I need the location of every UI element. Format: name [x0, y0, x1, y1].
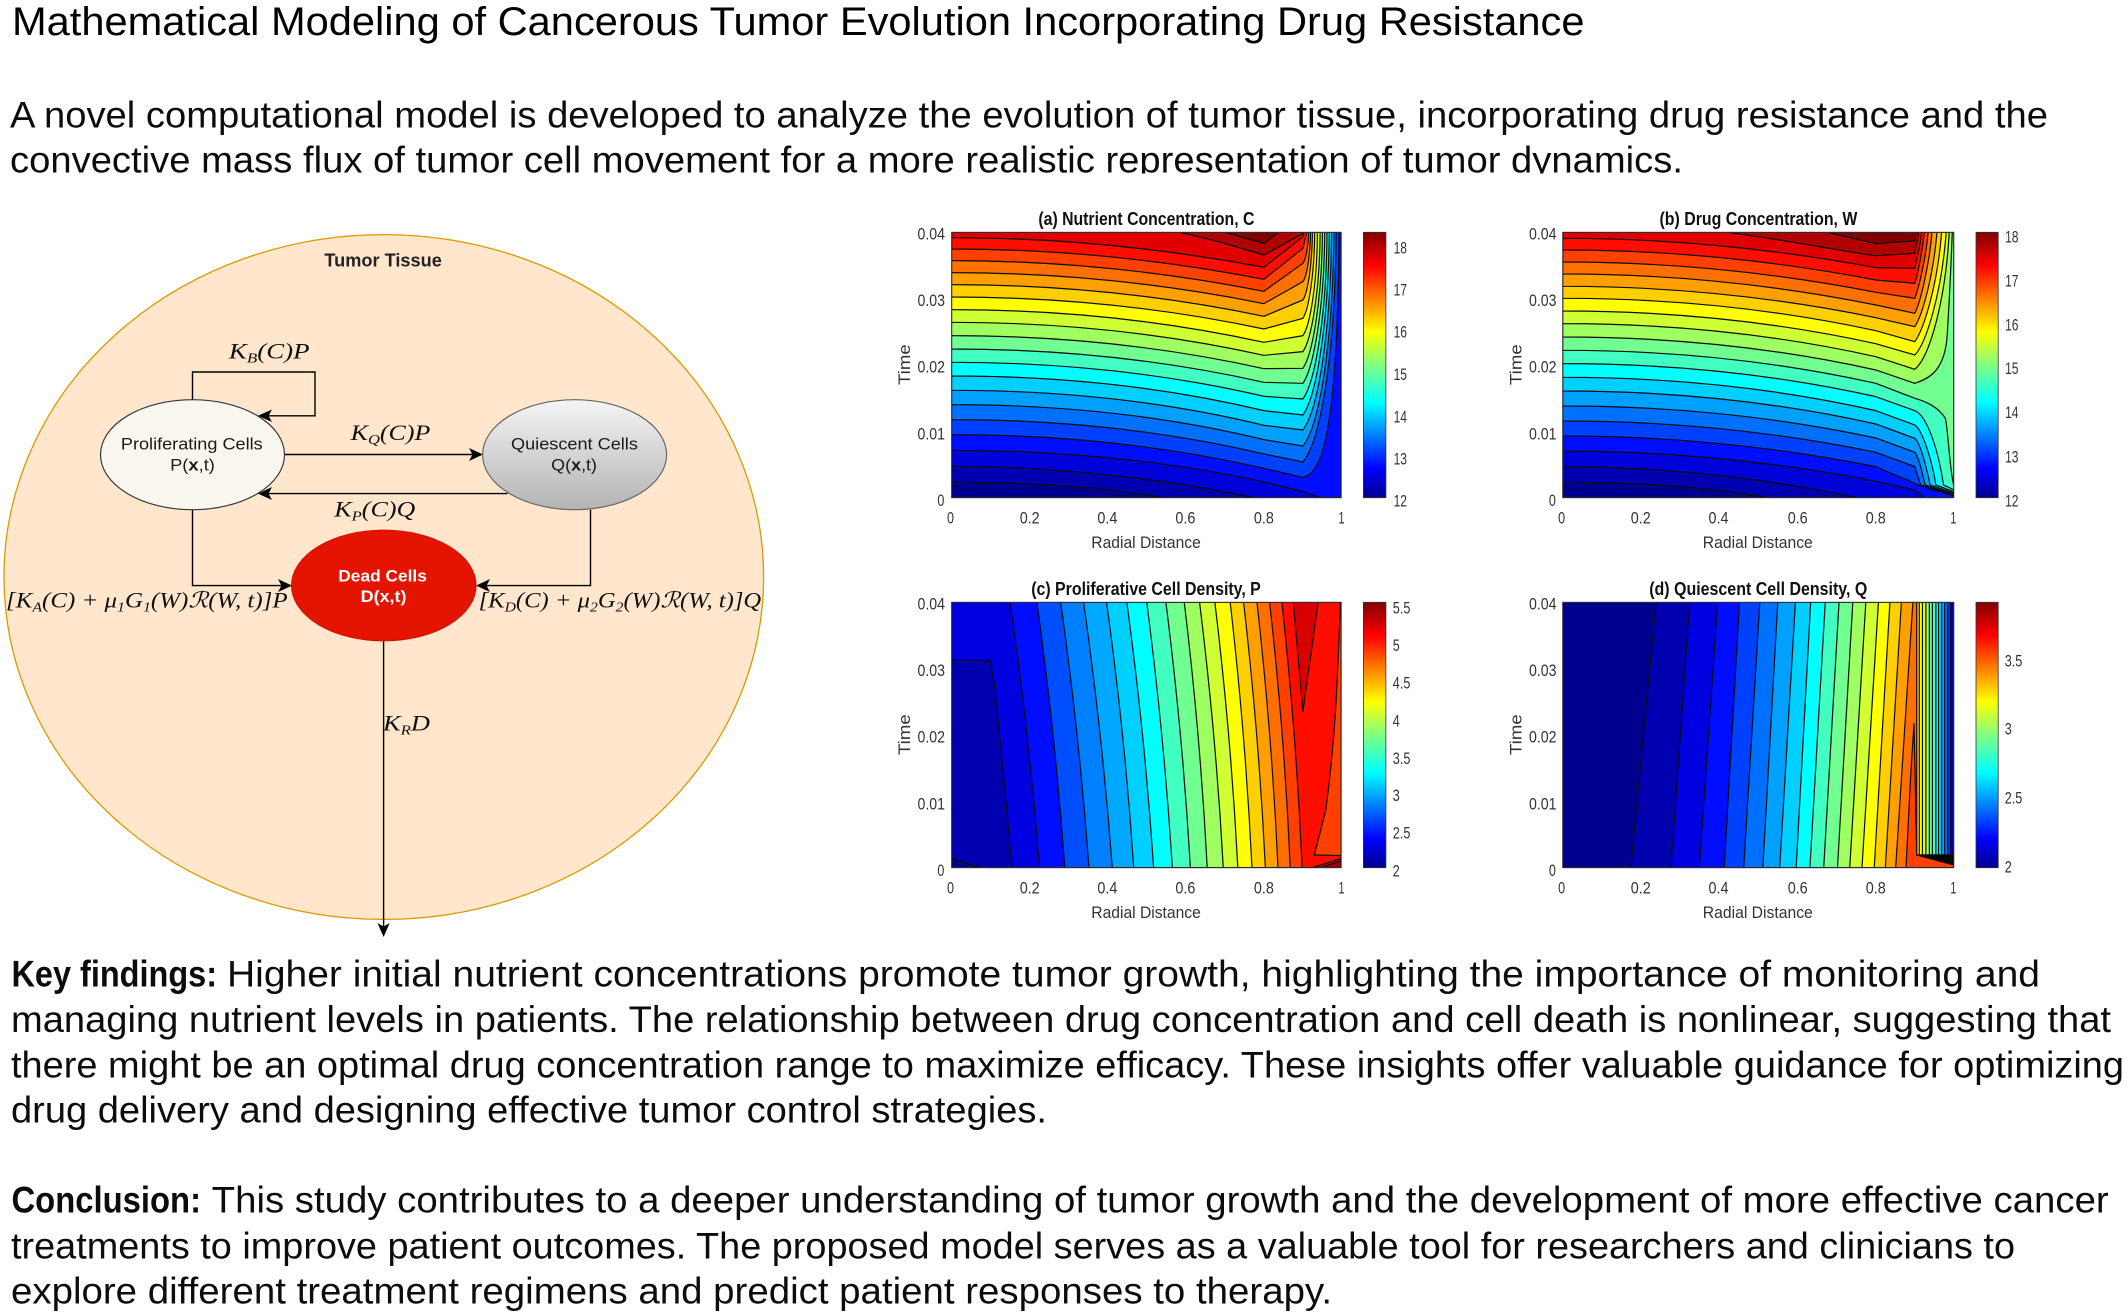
- y axis ticks c: [918, 594, 945, 880]
- x axis ticks c: 0.8: [1254, 878, 1274, 898]
- rate label: quiescent death rate: 2: [616, 600, 623, 615]
- colorbar c: 5: [1393, 636, 1400, 655]
- y axis ticks d: 0.02: [1529, 728, 1556, 747]
- colorbar b: 12: [2005, 491, 2018, 510]
- x axis label a: Radial Distance: [1091, 533, 1201, 552]
- chart: (a) nutrient concentration contour: [895, 209, 1407, 552]
- plot frame b: [1563, 232, 1954, 498]
- colorbar b: 13: [2005, 447, 2018, 466]
- x axis ticks a: 0: [947, 508, 954, 528]
- y axis label a: Time: [895, 344, 914, 385]
- rate label: proliferating death rate: (C) + μ: [42, 587, 117, 612]
- x axis ticks a: 1: [1338, 508, 1344, 528]
- colorbar c: 3: [1393, 786, 1400, 805]
- node: proliferating cells: Proliferating Cells: [121, 435, 263, 454]
- key findings text block: [11, 954, 2124, 1131]
- rate label: quiescent death rate: 2: [590, 600, 598, 615]
- x axis ticks d: [1558, 878, 1956, 898]
- y axis ticks a: 0.03: [918, 291, 945, 310]
- chart title c: (c) Proliferative Cell Density, P: [1031, 579, 1261, 599]
- colorbar b: [1976, 228, 2018, 510]
- title: Mathematical Modeling of Cancerous Tumor Evolution Incorporating Drug Resistance: [12, 0, 1584, 44]
- x axis ticks b: 0.2: [1631, 508, 1651, 528]
- rate label: KB(C)P: K: [229, 339, 244, 364]
- plot frame a: [952, 232, 1341, 498]
- node: proliferating cells: P(x,t): [170, 456, 215, 474]
- arrow: dead cell removal: [378, 641, 390, 937]
- rate label: proliferating death rate: 1: [143, 600, 151, 615]
- rate label: proliferating death rate: 1: [117, 600, 125, 615]
- colorbar c: 3.5: [1393, 749, 1410, 768]
- colorbar c: 4: [1393, 711, 1400, 730]
- node: quiescent cells: [483, 400, 667, 510]
- arrow: proliferating to dead: [192, 510, 292, 592]
- colorbar d: 3.5: [2005, 651, 2022, 670]
- colorbar a: 18: [1394, 238, 1407, 257]
- x axis ticks a: 0.6: [1175, 508, 1195, 528]
- rate label: KRD: K: [383, 710, 398, 736]
- key findings text block: drug delivery and designing effective tumor control strategies.: [11, 1090, 1047, 1131]
- y axis ticks a: 0.04: [918, 224, 945, 244]
- y axis ticks c: 0.01: [918, 794, 945, 813]
- rate label: KRD: R: [399, 724, 411, 738]
- y axis label d: Time: [1506, 714, 1526, 755]
- y axis ticks b: 0.04: [1529, 224, 1556, 244]
- rate label: proliferating death rate: (W)ℛ(W, t)]P: [151, 587, 288, 612]
- y axis label b: Time: [1506, 344, 1526, 385]
- conclusion text block: treatments to improve patient outcomes. The proposed model serves as a valuable tool for researchers and clinicians to: [11, 1225, 2015, 1266]
- panel: tumor tissue compartment diagram: [4, 235, 764, 937]
- x axis ticks a: 0.8: [1254, 508, 1274, 528]
- node: dead cells: D(x,t): [361, 587, 406, 606]
- colorbar d: 2: [2005, 857, 2012, 876]
- tumor tissue circle: [4, 235, 764, 919]
- colorbar a: 14: [1394, 407, 1407, 426]
- rate label: KQ(C)P: (C)P: [380, 420, 430, 445]
- node: quiescent cells: Quiescent Cells: [511, 435, 638, 454]
- plot frame d: [1563, 602, 1954, 868]
- y axis ticks a: 0.02: [918, 358, 945, 377]
- x axis label c: Radial Distance: [1091, 903, 1201, 922]
- x axis ticks b: 0.4: [1708, 508, 1728, 528]
- x axis ticks c: 0.2: [1020, 878, 1040, 898]
- rate label: quiescent death rate: (C) + μ: [516, 587, 590, 612]
- x axis ticks d: 0.6: [1788, 878, 1808, 898]
- key findings text block: Key findings:: [12, 954, 217, 995]
- y axis ticks c: 0.02: [918, 728, 945, 747]
- y axis ticks c: 0.04: [918, 594, 945, 614]
- rate label: KB(C)P: (C)P: [257, 339, 310, 364]
- colorbar a: 12: [1394, 491, 1407, 510]
- y axis ticks b: 0: [1549, 491, 1556, 510]
- chart: (d) quiescent cell density contour: [1506, 579, 2022, 922]
- contour field a: [952, 232, 1341, 498]
- colorbar a: [1363, 232, 1407, 510]
- colorbar a: 15: [1394, 365, 1407, 384]
- y axis ticks c: 0.03: [918, 661, 945, 680]
- y axis ticks a: 0.01: [918, 424, 945, 443]
- rate label: proliferating death rate: A: [31, 600, 43, 615]
- conclusion text block: explore different treatment regimens and predict patient responses to therapy.: [11, 1270, 1332, 1311]
- colorbar d: [1976, 602, 2022, 876]
- conclusion text block: [11, 1180, 2109, 1311]
- node: dead cells: Dead Cells: [338, 566, 427, 585]
- y axis ticks b: 0.01: [1529, 424, 1556, 443]
- colorbar c: [1363, 598, 1410, 880]
- conclusion text block: This study contributes to a deeper understanding of tumor growth and the development of more effective cancer: [212, 1180, 2109, 1221]
- key findings text block: managing nutrient levels in patients. The relationship between drug concentration and cell death is nonlinear, suggesting that: [11, 999, 2112, 1040]
- node: dead cells: [292, 530, 476, 641]
- x axis label b: Radial Distance: [1703, 533, 1813, 552]
- node: quiescent cells: Q(x,t): [551, 456, 597, 474]
- rate label: quiescent death rate: (W)ℛ(W, t)]Q: [623, 587, 761, 612]
- arrow: quiescent to dead: [476, 510, 590, 592]
- y axis ticks d: [1529, 594, 1556, 880]
- rate label: KQ(C)P: Q: [368, 433, 380, 448]
- y axis ticks b: 0.02: [1529, 358, 1556, 377]
- x axis ticks d: 0: [1558, 878, 1565, 898]
- chart title b: (b) Drug Concentration, W: [1660, 209, 1857, 229]
- colorbar c: 4.5: [1393, 674, 1410, 693]
- x axis label d: Radial Distance: [1703, 903, 1813, 922]
- colorbar b: 17: [2005, 272, 2018, 291]
- key findings text block: there might be an optimal drug concentration range to maximize efficacy. These insights offer valuable guidance for optimizing: [11, 1044, 2124, 1085]
- rate label: quiescent death rate: G: [598, 587, 616, 612]
- x axis ticks c: 0.4: [1097, 878, 1117, 898]
- x axis ticks c: 0: [947, 878, 954, 898]
- rate label: quiescent death rate: D: [503, 600, 516, 615]
- rate label: KP(C)Q: K: [334, 497, 349, 522]
- subtitle text block: A novel computational model is developed to analyze the evolution of tumor tissue, incorporating drug resistance and the: [10, 95, 2048, 136]
- x axis ticks b: [1558, 508, 1956, 528]
- x axis ticks d: 0.2: [1631, 878, 1651, 898]
- colorbar a: 13: [1394, 449, 1407, 468]
- rate label: KB(C)P: B: [247, 352, 258, 367]
- chart title d: (d) Quiescent Cell Density, Q: [1649, 579, 1867, 599]
- rate label: proliferating death rate: G: [125, 587, 143, 612]
- x axis ticks a: [947, 508, 1344, 528]
- plot frame c: [952, 602, 1341, 868]
- x axis ticks d: 1: [1950, 878, 1956, 898]
- x axis ticks a: 0.2: [1020, 508, 1040, 528]
- arrow: proliferating to quiescent: [285, 448, 483, 461]
- y axis ticks b: 0.03: [1529, 291, 1556, 310]
- colorbar c: 5.5: [1393, 598, 1410, 617]
- rate label: KQ(C)P: K: [351, 420, 365, 445]
- conclusion text block: Conclusion:: [12, 1180, 201, 1221]
- y axis ticks b: [1529, 224, 1556, 510]
- subtitle text block: convective mass flux of tumor cell movement for a more realistic representation of tumor dynamics.: [10, 139, 1683, 180]
- y axis ticks d: 0: [1549, 861, 1556, 880]
- contour field d: [1563, 602, 1954, 868]
- chart: (c) proliferative cell density contour: [895, 579, 1410, 922]
- contour field b: [1563, 232, 1954, 498]
- y axis ticks a: [918, 224, 945, 510]
- y axis ticks d: 0.03: [1529, 661, 1556, 680]
- rate label: KP(C)Q: P: [350, 510, 362, 525]
- contour field c: [952, 602, 1341, 868]
- rate label: KRD: D: [410, 710, 430, 736]
- chart title a: (a) Nutrient Concentration, C: [1038, 209, 1254, 229]
- x axis ticks b: 0.6: [1788, 508, 1808, 528]
- y axis label c: Time: [895, 714, 914, 755]
- x axis ticks d: 0.4: [1708, 878, 1728, 898]
- rate label: quiescent death rate: [K: [479, 587, 502, 612]
- x axis ticks b: 1: [1950, 508, 1956, 528]
- colorbar d: 2.5: [2005, 789, 2022, 808]
- colorbar b: 14: [2005, 403, 2018, 422]
- colorbar a: 17: [1394, 280, 1407, 299]
- colorbar d: 3: [2005, 720, 2012, 739]
- chart: (b) drug concentration contour: [1506, 209, 2018, 552]
- colorbar a: 16: [1394, 323, 1407, 342]
- label: tumor tissue: Tumor Tissue: [324, 251, 442, 271]
- x axis ticks b: 0: [1558, 508, 1565, 528]
- x axis ticks c: [947, 878, 1344, 898]
- x axis ticks b: 0.8: [1866, 508, 1886, 528]
- colorbar b: 16: [2005, 315, 2018, 334]
- rate label: KP(C)Q: (C)Q: [362, 497, 415, 522]
- colorbar b: 18: [2005, 228, 2018, 247]
- x axis ticks d: 0.8: [1866, 878, 1886, 898]
- node: proliferating cells: [100, 400, 284, 510]
- x axis ticks a: 0.4: [1097, 508, 1117, 528]
- colorbar c: 2: [1393, 861, 1400, 880]
- arrow: quiescent to proliferating: [258, 487, 508, 500]
- arrow: proliferation self loop: [192, 372, 315, 422]
- key findings text block: Higher initial nutrient concentrations promote tumor growth, highlighting the importance of monitoring and: [227, 954, 2040, 995]
- x axis ticks c: 1: [1338, 878, 1344, 898]
- y axis ticks c: 0: [937, 861, 944, 880]
- y axis ticks d: 0.04: [1529, 594, 1556, 614]
- subtitle text block: [10, 100, 2046, 174]
- y axis ticks a: 0: [937, 491, 944, 510]
- colorbar c: 2.5: [1393, 824, 1410, 843]
- x axis ticks c: 0.6: [1175, 878, 1195, 898]
- y axis ticks d: 0.01: [1529, 794, 1556, 813]
- rate label: proliferating death rate: [K: [6, 587, 29, 612]
- colorbar b: 15: [2005, 359, 2018, 378]
